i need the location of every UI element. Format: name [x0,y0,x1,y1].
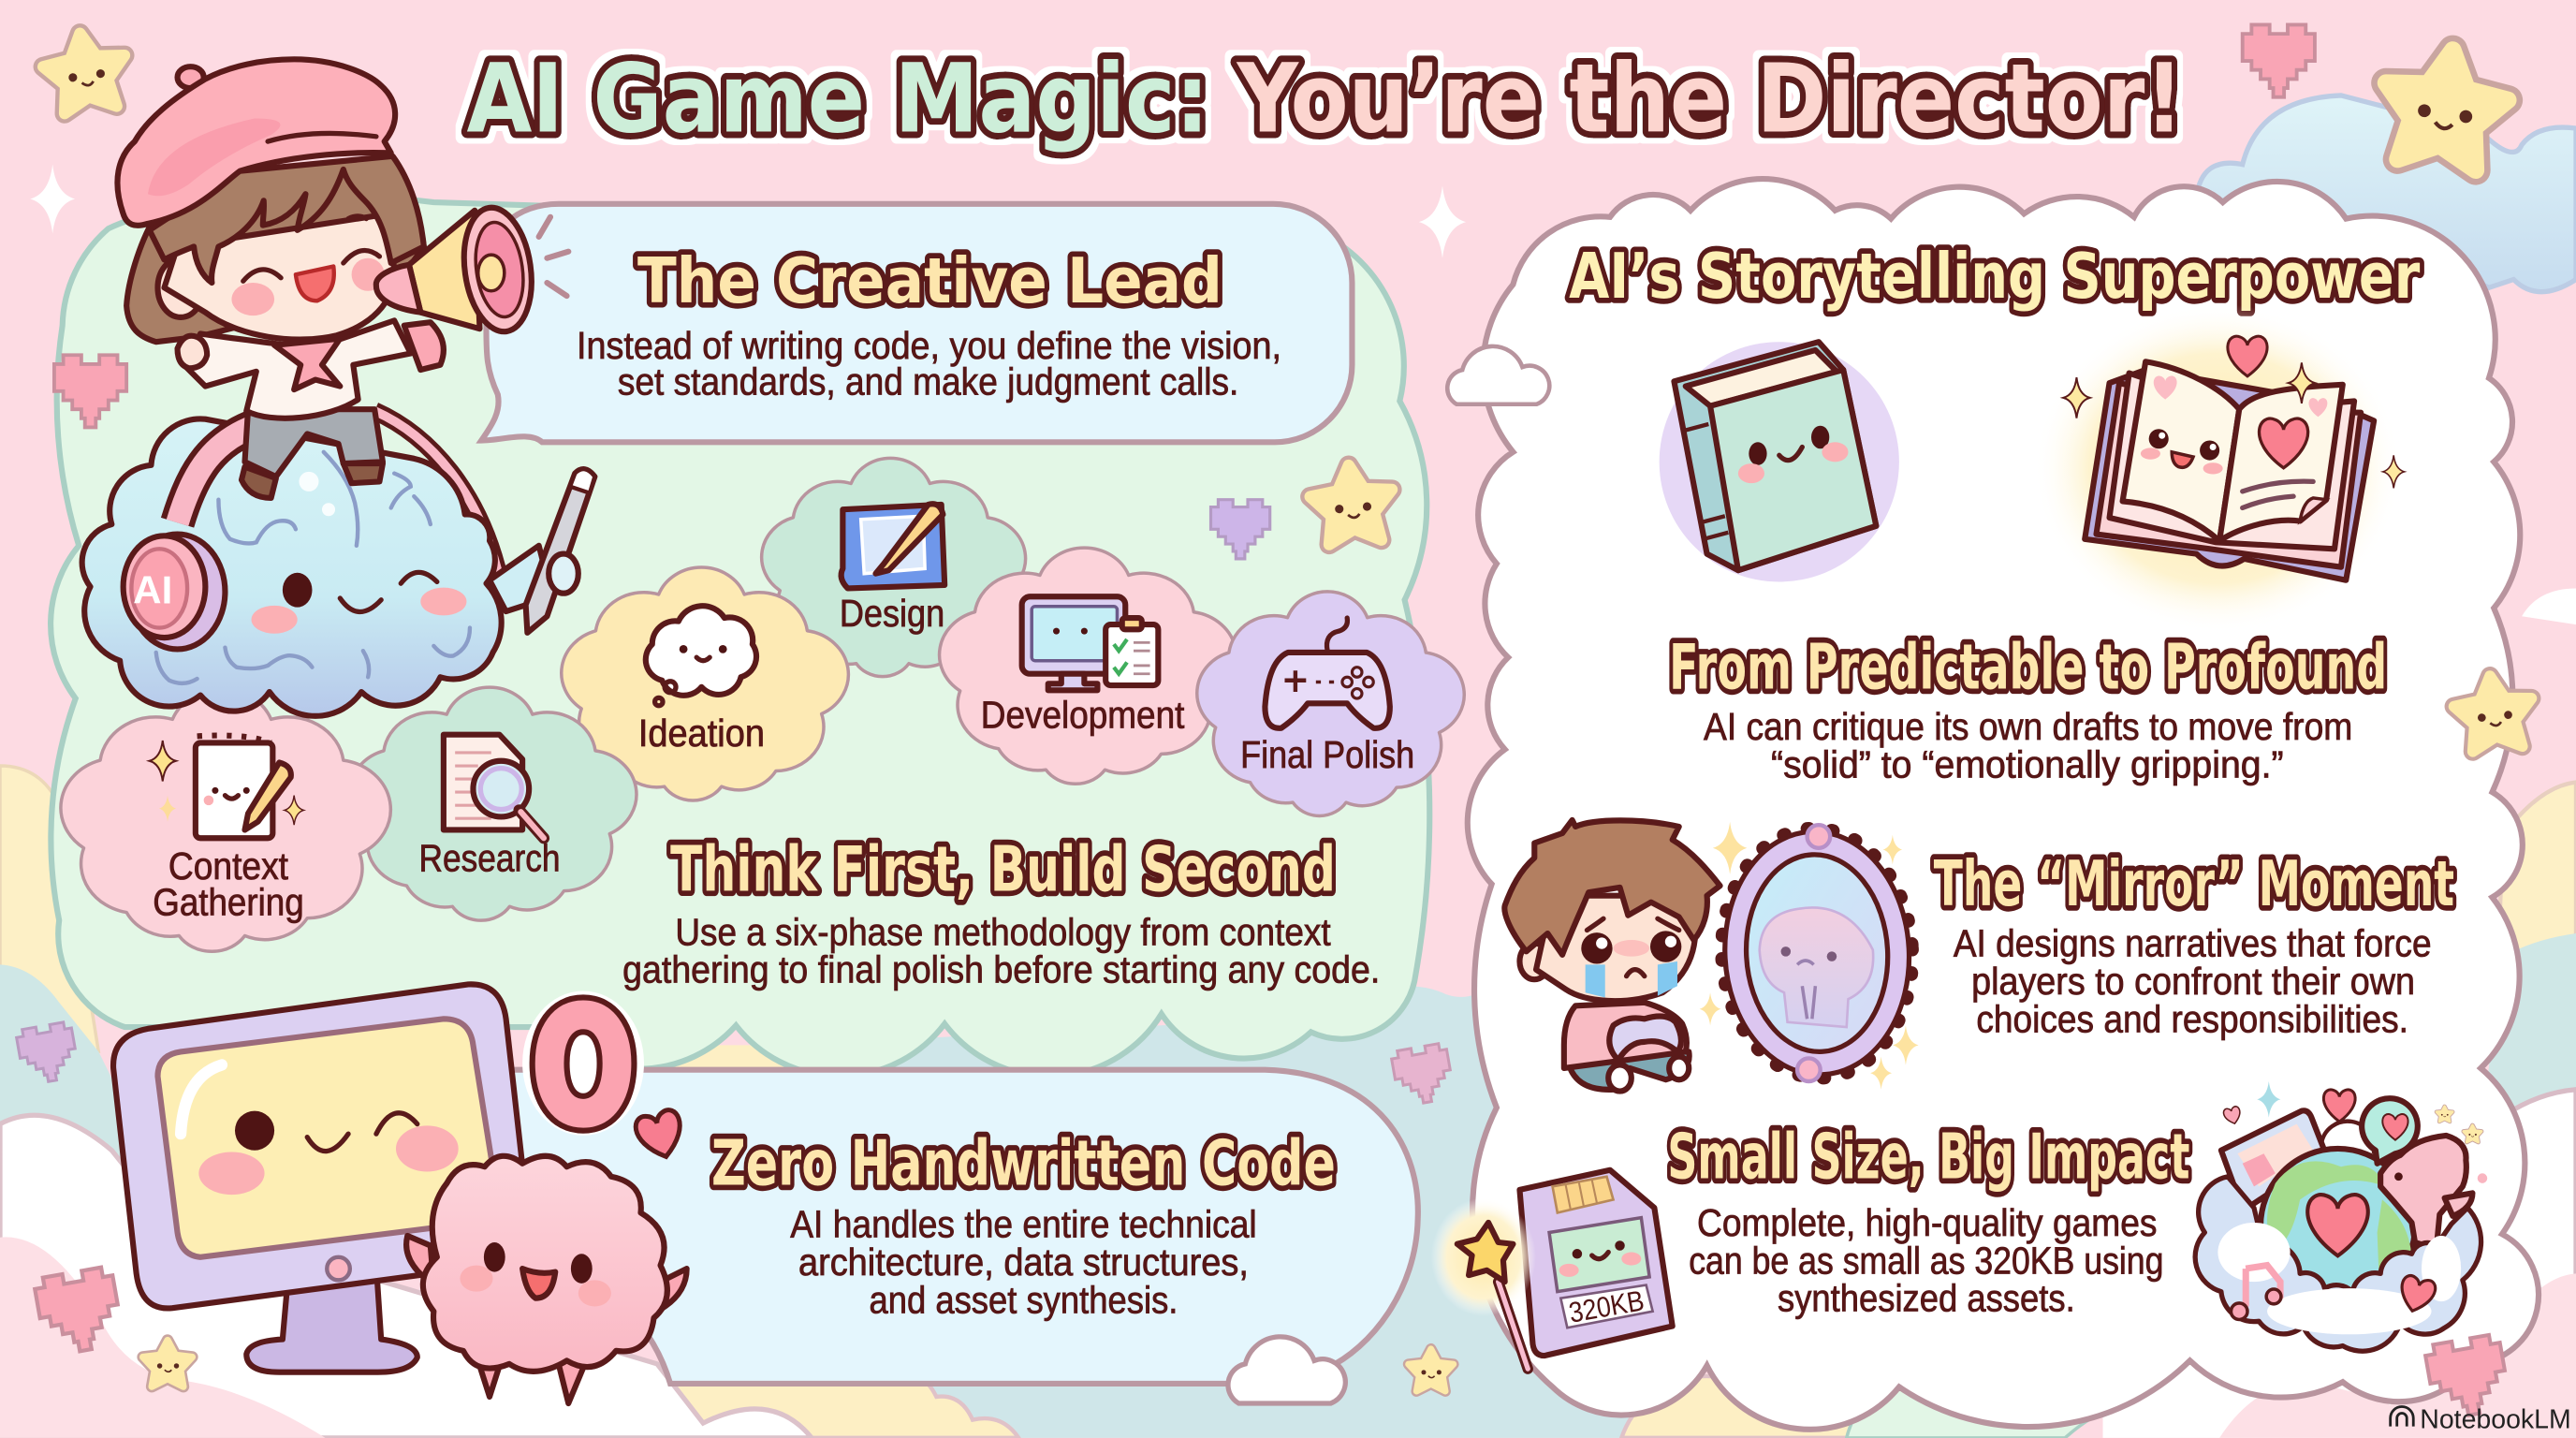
cloud front [2195,1177,2481,1351]
text: think first description: Use a six-phase methodology from context [675,910,1331,953]
text: small size description: Complete, high-quality games [1697,1201,2157,1244]
brain face [252,572,466,634]
text: predictable description: AI can critique its own drafts to move from [1704,705,2352,748]
text: small size description [1689,1201,2163,1320]
illustration: SD card 320KB: 320KB [1566,1284,1647,1329]
text: mirror description: choices and responsibilities. [1976,997,2408,1040]
phase cloud: development [940,548,1237,784]
beret [117,59,395,226]
speech bubble: the creative lead [481,204,1352,442]
label: development: Development [981,694,1184,737]
face [1536,896,1695,1001]
icon: document and magnifier [444,735,544,838]
text: mirror description: AI designs narratives that force [1954,922,2432,965]
character: brain with headphones [82,411,594,716]
character: pink fluffy brain [406,1156,687,1403]
illustration: closed green book [1660,342,1899,581]
icon: monitor and clipboard [1022,596,1158,690]
panel: zero handwritten code [509,1070,1418,1384]
icon: star wand [1431,1198,1536,1369]
title: You’re the Director! [1237,45,2184,155]
text: zero handwritten description: and asset synthesis. [869,1278,1178,1321]
face [165,213,394,340]
character: director with beret and megaphone [117,59,568,498]
label: design: Design [840,592,944,635]
label: research: Research [419,836,560,879]
heading: zero handwritten code: Zero Handwritten Code [711,1127,1336,1200]
illustration: SD card 320KB [1519,1170,1673,1356]
phase cloud: ideation [562,567,848,800]
text: mirror description: players to confront their own [1971,960,2415,1003]
label: context gathering [153,844,304,924]
illustration: glowing open book [2034,304,2405,633]
crying face [1581,918,1681,997]
label: context gathering: Context [168,844,288,888]
panel: storytelling white cloud [1468,179,2539,1430]
title: AI Game Magic: [466,45,1209,155]
illustration: smiling monitor [113,984,529,1372]
label: ideation: Ideation [638,712,765,755]
sweater [1564,1003,1687,1068]
phase cloud: design [762,458,1026,677]
ear [1519,944,1549,979]
pants and shoes [1569,1051,1690,1090]
hair back [126,156,424,342]
heading: small size, big impact: Small Size, Big Impact [1667,1121,2190,1194]
text: predictable description: “solid” to “emotionally gripping.” [1771,742,2284,785]
illustration: heart world on cloud [2195,1081,2487,1351]
icon: notepad and pencil [150,736,303,838]
stylus arm [490,546,552,611]
phase cloud: final polish [1197,592,1464,815]
title [466,45,2184,155]
text: mirror description [1954,922,2432,1040]
text: think first description: gathering to final polish before starting any code. [622,948,1380,991]
text: small size description: can be as small as 320KB using [1689,1239,2163,1282]
icon: game controller [1265,618,1390,728]
text: zero handwritten description [790,1203,1257,1321]
icon: big zero [522,990,644,1136]
text: small size description: synthesized assets. [1778,1277,2075,1320]
sound lines [539,217,568,296]
illustration: crying boy with controller [1504,820,1720,1092]
text: zero handwritten description: architecture, data structures, [798,1240,1249,1284]
text: zero handwritten description: AI handles the entire technical [790,1203,1257,1246]
megaphone [376,203,539,370]
text: predictable description [1704,705,2352,785]
headphone band right [374,411,500,579]
heading: the creative lead: The Creative Lead [637,244,1222,317]
brain body [82,418,502,716]
earcup with AI [124,535,225,649]
panel: left green cloud [51,196,1429,1077]
phase cloud: research [349,687,637,920]
illustration: mirror with sad brain [1700,822,1919,1090]
text: creative lead description [577,324,1281,403]
phase cloud: context gathering [61,689,390,951]
text: think first description [622,910,1380,991]
bangs [150,156,424,283]
torso and arms [184,320,411,418]
icon: small cloud on white panel edge [1447,346,1549,404]
label: context gathering: Gathering [153,881,304,924]
stylus and hand [526,469,594,633]
controller [1609,1016,1681,1060]
label: final polish: Final Polish [1240,733,1414,776]
text: creative lead description: set standards, and make judgment calls. [618,360,1238,403]
heading: think first, build second: Think First, Build Second [670,832,1336,905]
legs and shoes [245,409,383,477]
icon: blueprint and pencil [842,504,944,588]
hair [1504,820,1720,955]
heading: AI's storytelling superpower: AI’s Storytelling Superpower [1569,240,2420,313]
happy face [231,216,385,315]
ear [157,258,204,317]
icon: small cloud bottom centre [1228,1337,1345,1403]
fist [178,336,207,368]
logo: NotebookLM: NotebookLM [2420,1404,2571,1434]
icon: heart near zero [633,1108,687,1163]
scarf [274,339,340,389]
text: creative lead description: Instead of writing code, you define the vision, [577,324,1281,367]
headphone band left [178,424,259,522]
icon: thought cloud [646,606,756,706]
earcup with AI: AI [133,567,172,611]
